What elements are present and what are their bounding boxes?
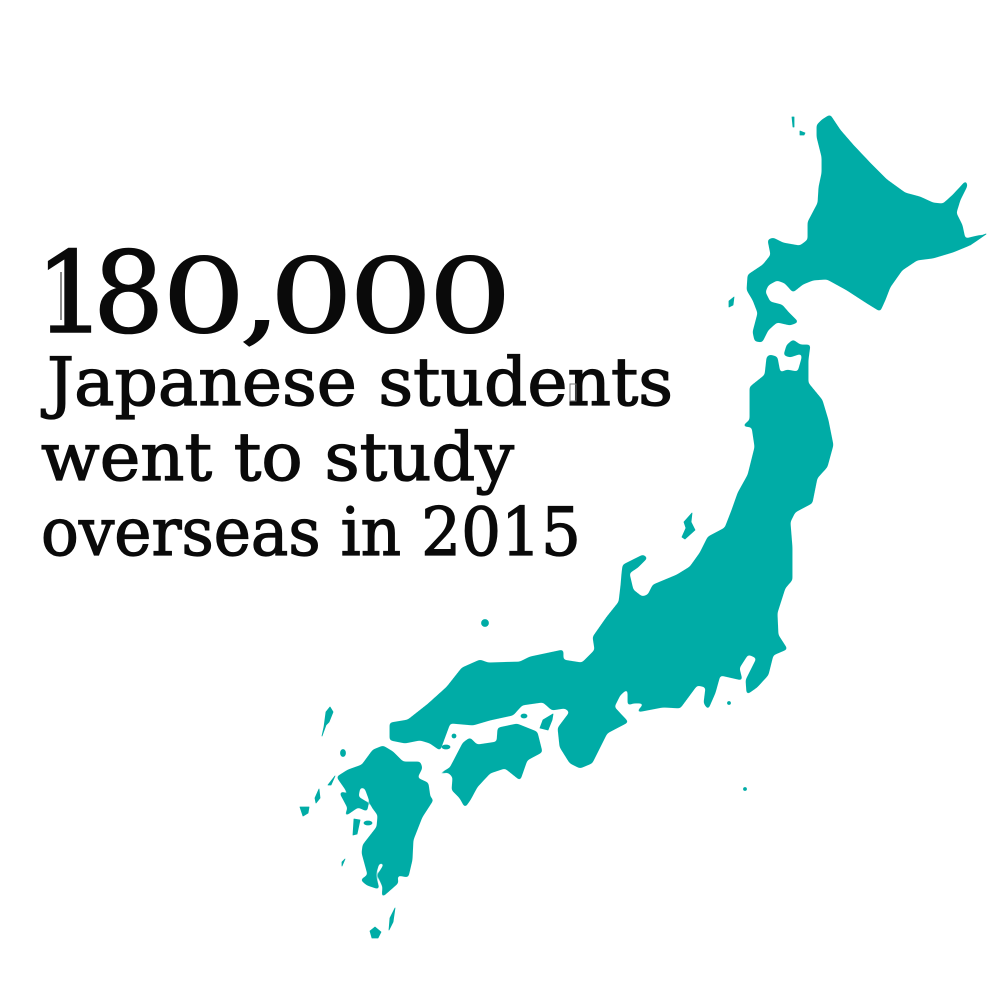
map: Kyushu: [337, 746, 433, 897]
map: smaller islands: [300, 117, 986, 938]
headline number: 0,000: [162, 236, 512, 356]
map: Shikoku: [437, 724, 542, 807]
description text: Japanese students: [41, 344, 673, 421]
description text: overseas in 2015: [41, 494, 581, 571]
map: main islands: [337, 115, 986, 897]
description text: went to study: [41, 419, 515, 496]
headline number: [35, 229, 512, 359]
map of Japan: [300, 115, 986, 938]
description text: [41, 344, 673, 571]
map: Honshu: [390, 340, 833, 768]
headline number: 18: [35, 229, 164, 359]
map: Hokkaido: [747, 115, 986, 342]
